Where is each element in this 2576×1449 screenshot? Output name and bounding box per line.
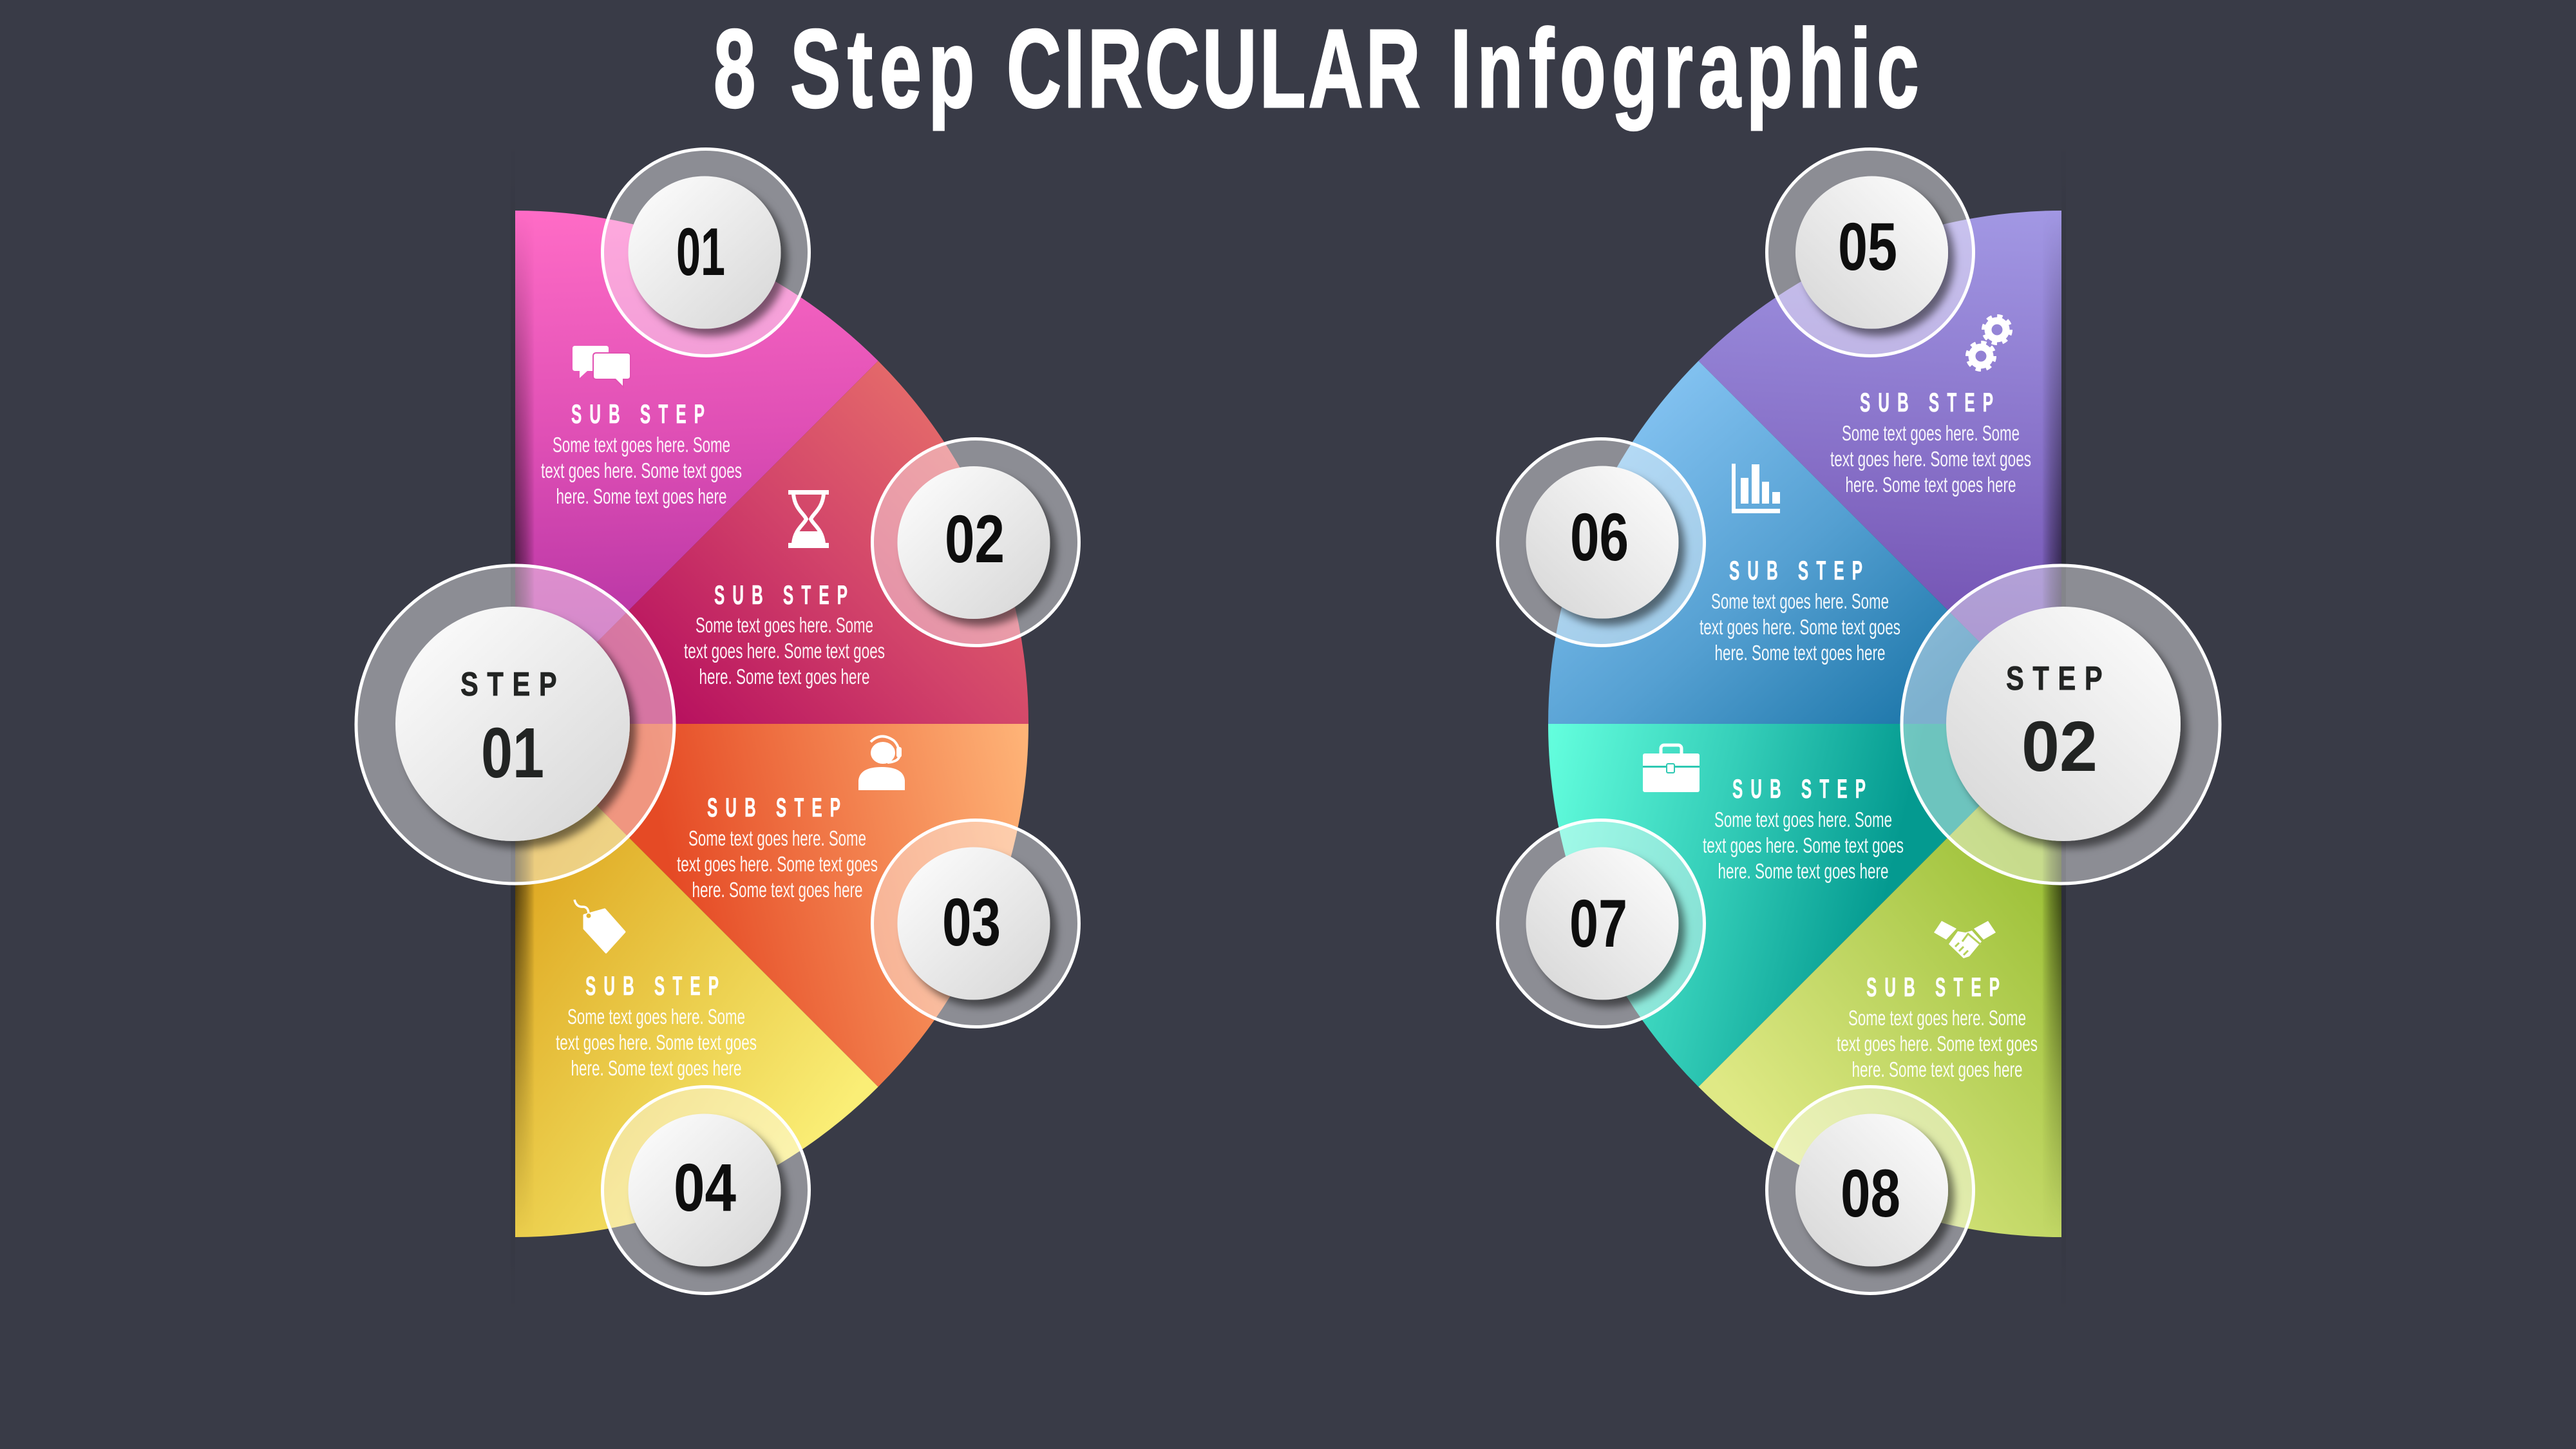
icon: hourglass [788,490,829,548]
title: CIRCULAR [1007,6,1421,131]
icon: handshake [1934,921,1996,958]
panel: right half circle [1548,211,2066,1237]
outer faint shadow right [2061,135,2066,1320]
text block: sub step 3: here. Some text goes here [692,878,863,902]
text block: sub step 3: SUB STEP [707,793,840,823]
segment 02 crimson [515,361,1028,724]
icon: gears [1967,316,2011,370]
badge: step 01: STEP [460,665,557,703]
panel: left half circle [511,211,1028,1237]
badge: 07: 07 [1569,886,1627,961]
text block: sub step 1: text goes here. Some text goes [541,459,742,482]
segment 07 teal [1548,724,2061,1087]
text block: sub step 7 [1703,774,1904,883]
text block: sub step 6: text goes here. Some text goes [1700,615,1900,639]
text block: sub step 7: Some text goes here. Some [1714,808,1892,831]
icon: price tag [574,900,625,952]
text block: sub step 5: text goes here. Some text goes [1830,447,2031,471]
badge: 03 [872,820,1079,1027]
segment 03 orange [515,724,1028,1087]
text block: sub step 8: SUB STEP [1866,972,2000,1003]
text block: sub step 7: text goes here. Some text goes [1703,833,1904,857]
text block: sub step 7: SUB STEP [1732,774,1866,804]
text block: sub step 8: Some text goes here. Some [1848,1006,2026,1030]
icon: bar chart [1732,464,1780,513]
text block: sub step 2 [684,580,885,688]
segment 01 pink [515,211,878,724]
badge: 06 [1498,439,1704,645]
badge: step 01 [356,565,674,884]
badge: 06: 06 [1570,500,1629,575]
text block: sub step 1: SUB STEP [571,399,705,430]
badge: step 02: STEP [2006,659,2103,697]
text block: sub step 5: SUB STEP [1860,388,1993,418]
text block: sub step 2: Some text goes here. Some [696,613,873,637]
text block: sub step 4: Some text goes here. Some [567,1005,745,1028]
text block: sub step 1 [541,399,742,508]
segment 05 violet [1698,211,2061,724]
badge: step 02: 02 [2022,707,2098,786]
text block: sub step 6: here. Some text goes here [1714,641,1886,665]
text block: sub step 5 [1830,388,2031,497]
segment 06 blue [1548,361,2061,724]
badge: 01 [603,149,809,355]
badge: 01: 01 [676,214,725,290]
badge: step 01: 01 [481,714,544,793]
badge: 02 [872,439,1079,645]
badge: 08: 08 [1841,1156,1900,1231]
outer faint shadow left [511,135,515,1320]
text block: sub step 8: here. Some text goes here [1852,1057,2022,1081]
badge: 04: 04 [674,1150,736,1226]
text block: sub step 3: Some text goes here. Some [688,826,866,850]
text block: sub step 2: text goes here. Some text goes [684,639,885,663]
text block: sub step 5: here. Some text goes here [1846,473,2016,497]
text block: sub step 4 [556,971,757,1080]
text block: sub step 8 [1837,972,2038,1081]
title: Infographic [1450,6,1919,131]
badge: 03: 03 [942,885,1001,960]
text block: sub step 4: SUB STEP [585,971,719,1001]
text block: sub step 2: SUB STEP [714,580,848,611]
segment 08 lime [1698,724,2061,1237]
icon: briefcase [1643,745,1700,792]
badge: 02: 02 [945,502,1005,577]
text block: sub step 1: Some text goes here. Some [553,433,730,457]
text block: sub step 3 [677,793,878,902]
icon: chat bubbles [573,346,630,386]
title: 8 Step [714,6,974,131]
fold shadow right edge [2042,211,2061,1237]
text block: sub step 8: text goes here. Some text goes [1837,1032,2038,1056]
text block: sub step 4: here. Some text goes here [571,1056,742,1080]
badge: 05: 05 [1838,209,1897,285]
icon: headset agent [858,736,905,790]
text block: sub step 2: here. Some text goes here [699,665,869,688]
badge: 07 [1498,820,1704,1027]
segment 04 yellow [515,724,878,1237]
badge: 05 [1767,149,1973,355]
badge: 04 [603,1087,809,1293]
fold shadow left edge [515,211,535,1237]
badge: step 02 [1902,565,2220,884]
text block: sub step 4: text goes here. Some text goes [556,1030,757,1054]
text block: sub step 6 [1700,556,1900,665]
text block: sub step 6: SUB STEP [1729,556,1862,586]
text block: sub step 5: Some text goes here. Some [1842,421,2020,445]
text block: sub step 3: text goes here. Some text goes [677,852,878,876]
title [714,6,1919,131]
text block: sub step 1: here. Some text goes here [556,484,726,508]
text block: sub step 7: here. Some text goes here [1718,859,1888,883]
text block: sub step 6: Some text goes here. Some [1711,589,1889,613]
badge: 08 [1767,1087,1973,1293]
